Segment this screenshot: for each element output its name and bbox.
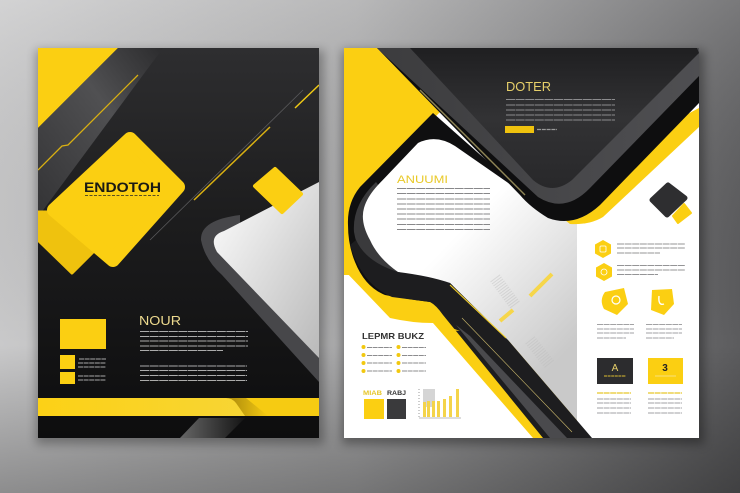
white panel with grey border xyxy=(201,182,319,382)
body text on dark panel xyxy=(506,100,615,120)
yellow lower band xyxy=(348,275,577,438)
large yellow diamond xyxy=(54,139,178,260)
icon: hexagon 1 xyxy=(595,240,611,258)
cover subtitle micro text xyxy=(85,195,159,196)
body text block 1 xyxy=(140,332,248,350)
dark card: A xyxy=(612,363,619,374)
white content panel xyxy=(362,139,577,420)
yellow dashes xyxy=(500,274,552,321)
yellow feature block xyxy=(60,319,106,349)
yellow top-left and left strip xyxy=(344,48,440,275)
bullet list right xyxy=(396,345,426,373)
dark card xyxy=(597,358,633,384)
gold accent line right xyxy=(150,85,319,240)
right white column xyxy=(577,215,699,438)
bottom yellow band xyxy=(38,398,319,416)
halftone dots xyxy=(495,278,550,365)
label RABJ: RABJ xyxy=(387,390,406,397)
black outline behind white panel xyxy=(348,113,520,302)
gold accent line xyxy=(38,75,138,170)
icon: hexagon 2 xyxy=(596,263,612,281)
dark diagonal swoosh xyxy=(350,240,592,438)
bottom grey swoosh xyxy=(180,418,245,438)
feature text 2 xyxy=(617,266,685,274)
gold sheen line xyxy=(420,90,525,195)
bar chart xyxy=(419,389,461,418)
icon: yellow badge 2 xyxy=(651,289,674,315)
heading LEPMR BUKZ: LEPMR BUKZ xyxy=(362,331,424,341)
bullet list left xyxy=(362,345,392,373)
panel: right brochure page xyxy=(344,48,700,438)
yellow card: 3 xyxy=(662,363,668,374)
panel: left brochure page xyxy=(38,48,319,438)
cover title: ENDOTOH xyxy=(84,180,161,195)
feature text 1 xyxy=(617,244,685,253)
grey V band xyxy=(377,48,699,204)
small yellow diamond xyxy=(255,169,301,212)
dark swatch xyxy=(387,399,406,419)
badge text 1 xyxy=(597,324,634,338)
badge text 2 xyxy=(646,324,682,338)
heading NOUR: NOUR xyxy=(139,313,181,328)
darker yellow diamond behind xyxy=(38,212,95,273)
body text block 2 xyxy=(140,366,247,380)
yellow small square 2 xyxy=(60,372,75,384)
card text 1 xyxy=(597,393,631,413)
body text on white panel xyxy=(397,188,490,230)
grey inner edge of outline xyxy=(354,182,398,272)
side micro text xyxy=(78,359,106,380)
icon: yellow badge 1 xyxy=(602,288,628,315)
heading ANUUMI: ANUUMI xyxy=(397,174,448,186)
yellow small square 1 xyxy=(60,355,75,369)
yellow swatch xyxy=(364,399,384,419)
diagonal grey band xyxy=(38,48,150,210)
black V outer xyxy=(377,48,699,221)
card text 2 xyxy=(648,393,682,413)
yellow card xyxy=(648,358,683,384)
label MIAB: MIAB xyxy=(363,390,382,397)
yellow button xyxy=(505,126,534,133)
icon: dark diamond xyxy=(652,185,691,223)
yellow band under V xyxy=(566,108,699,224)
button caption xyxy=(537,128,557,130)
heading DOTER: DOTER xyxy=(506,80,551,94)
yellow corner xyxy=(38,48,118,128)
inner dark V xyxy=(410,48,699,188)
